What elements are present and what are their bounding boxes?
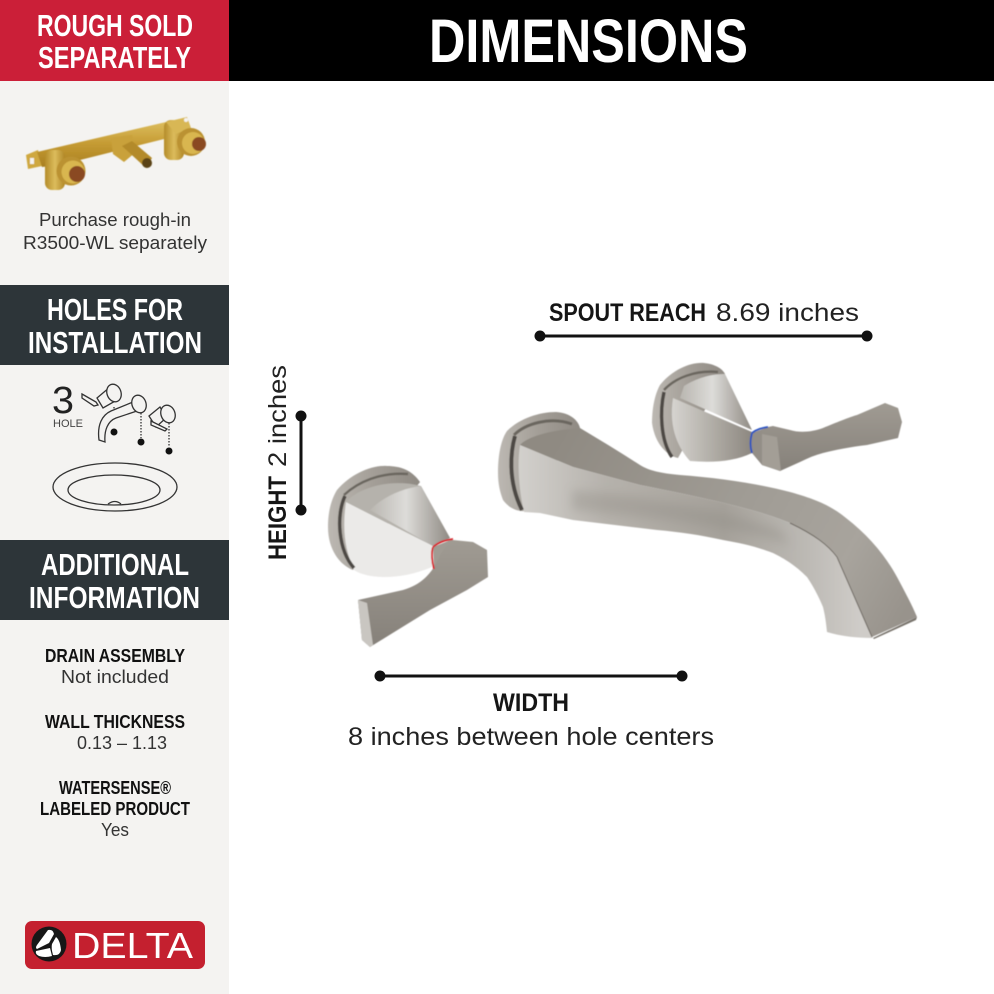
heading: rough sold separately bbox=[0, 0, 229, 81]
dimension: width: WIDTH bbox=[493, 689, 569, 717]
dimension: height bbox=[264, 365, 306, 560]
heading: additional information bbox=[0, 540, 229, 620]
heading: rough sold separately: SEPARATELY bbox=[38, 40, 191, 75]
text: drain assembly: Not included bbox=[61, 667, 169, 687]
text: purchase rough-in: R3500-WL separately bbox=[23, 233, 207, 253]
icon: three hole faucet and basin: 3 bbox=[52, 380, 74, 422]
dimension: height: HEIGHT bbox=[264, 476, 292, 560]
dimension: spout reach: SPOUT REACH bbox=[549, 299, 706, 327]
text: watersense labeled product: Yes bbox=[101, 820, 129, 840]
dimension: height: 2 inches bbox=[264, 365, 292, 467]
heading: holes for installation: HOLES FOR bbox=[47, 292, 183, 327]
title: DIMENSIONS bbox=[429, 7, 748, 75]
icon: three hole faucet and basin bbox=[52, 380, 178, 511]
logo: delta bbox=[25, 921, 205, 969]
heading: additional information: ADDITIONAL bbox=[41, 547, 189, 582]
dimension: width bbox=[348, 670, 714, 751]
dimension: spout reach bbox=[534, 299, 872, 342]
heading: holes for installation bbox=[0, 285, 229, 365]
icon: brass rough-in valve bbox=[26, 117, 206, 190]
title bbox=[229, 0, 994, 81]
heading: additional information: INFORMATION bbox=[29, 580, 200, 615]
icon: left handle bbox=[328, 466, 488, 647]
icon: spout bbox=[498, 412, 917, 639]
dimension: spout reach: 8.69 inches bbox=[716, 299, 859, 327]
dimension: width: 8 inches between hole centers bbox=[348, 723, 714, 751]
text: watersense labeled product bbox=[40, 778, 190, 840]
text: drain assembly: DRAIN ASSEMBLY bbox=[45, 646, 185, 666]
text: wall thickness: 0.13 – 1.13 bbox=[77, 733, 167, 753]
text: wall thickness: WALL THICKNESS bbox=[45, 712, 185, 732]
icon: three hole faucet and basin: HOLE bbox=[53, 418, 83, 430]
text: watersense labeled product: LABELED PRODUCT bbox=[40, 799, 190, 819]
text: watersense labeled product: WATERSENSE® bbox=[59, 778, 171, 798]
text: drain assembly bbox=[45, 646, 185, 687]
heading: rough sold separately: ROUGH SOLD bbox=[37, 8, 193, 43]
heading: holes for installation: INSTALLATION bbox=[28, 325, 202, 360]
text: purchase rough-in bbox=[23, 210, 207, 253]
panel: sidebar bbox=[0, 0, 229, 994]
icon: right handle bbox=[652, 363, 902, 471]
text: purchase rough-in: Purchase rough-in bbox=[39, 210, 191, 230]
text: wall thickness bbox=[45, 712, 185, 753]
logo: delta: DELTA bbox=[72, 925, 193, 966]
